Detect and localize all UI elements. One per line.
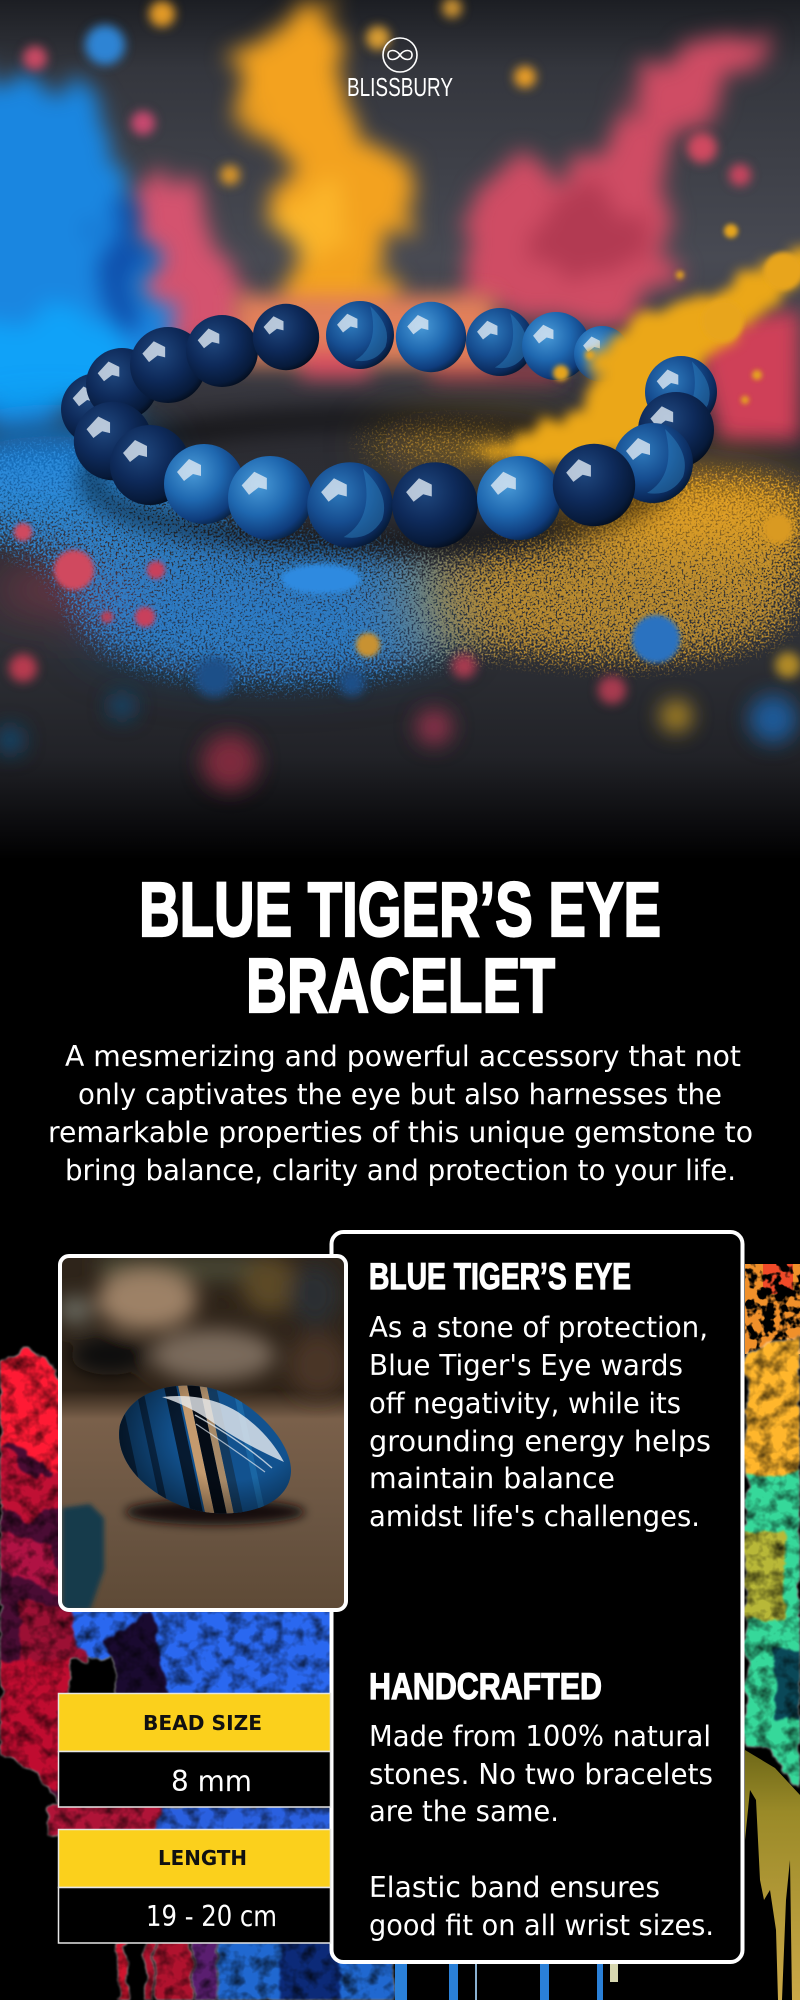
photo: polished tiger's eye stone [57, 1256, 348, 1610]
intro paragraph: remarkable properties of this unique gemstone to [48, 1116, 753, 1149]
speckled powder on the floor [0, 410, 800, 695]
text block: stone of protection [369, 1311, 711, 1533]
text block: handcrafted details: are the same. [369, 1795, 559, 1828]
golden powder sweep [459, 240, 800, 470]
intro paragraph: only captivates the eye but also harnesses the [78, 1078, 722, 1111]
title [139, 867, 661, 1029]
text block: handcrafted details [369, 1720, 714, 1942]
title: BRACELET [246, 943, 555, 1029]
intro paragraph: A mesmerizing and powerful accessory that not [65, 1040, 741, 1073]
small blue stone [62, 1504, 104, 1610]
pink and orange glow behind bracelet [235, 295, 800, 440]
text block: stone of protection: maintain balance [369, 1462, 615, 1495]
bracelet back row [61, 301, 630, 445]
logo: Blissbury [347, 38, 453, 102]
powder chunks and flying particles [0, 0, 800, 790]
text block: stone of protection: off negativity, while its [369, 1387, 681, 1420]
heading: Blue Tiger's Eye: BLUE TIGER’S EYE [369, 1256, 631, 1297]
blue powder plume [0, 70, 175, 430]
pink powder plume right [459, 30, 775, 320]
bracelet shadow [90, 418, 660, 542]
stone shadow [125, 1499, 305, 1525]
pink powder cloud left [125, 170, 255, 345]
label: BEAD SIZE [143, 1711, 262, 1735]
heading: Handcrafted: HANDCRAFTED [369, 1666, 602, 1707]
colourful paint splash behind the details [0, 1264, 800, 2000]
spec table: length [58, 1830, 330, 1943]
right paint [745, 1264, 800, 2000]
icon: infinity ring [383, 38, 417, 72]
text block: stone of protection: As a stone of protection, [369, 1311, 708, 1344]
text block: stone of protection: amidst life's challenges. [369, 1500, 700, 1533]
orange powder plume [235, 0, 420, 318]
tiger's eye egg [119, 1386, 291, 1514]
intro paragraph [48, 1040, 753, 1187]
text block: stone of protection: Blue Tiger's Eye wards [369, 1349, 683, 1382]
value: 19 - 20 cm [146, 1900, 277, 1933]
text block: stone of protection: grounding energy helps [369, 1425, 711, 1458]
floor glow [0, 420, 800, 680]
bracelet front row [74, 356, 717, 548]
left and lower paint [0, 1350, 393, 2000]
logo: Blissbury: BLISSBURY [347, 72, 453, 102]
text block: handcrafted details: Made from 100% natural [369, 1720, 711, 1753]
hero photo: bracelet in coloured powder [0, 0, 800, 860]
text block: handcrafted details: good fit on all wrist sizes. [369, 1909, 714, 1942]
label: LENGTH [158, 1846, 247, 1870]
text block: handcrafted details: stones. No two bracelets [369, 1758, 713, 1791]
spec table: bead size [58, 1694, 330, 1807]
intro paragraph: bring balance, clarity and protection to your life. [65, 1154, 736, 1187]
panel: text card [332, 1232, 742, 1962]
paint drips at the bottom [395, 1960, 618, 2000]
value: 8 mm [171, 1765, 252, 1798]
text block: handcrafted details: Elastic band ensures [369, 1871, 660, 1904]
